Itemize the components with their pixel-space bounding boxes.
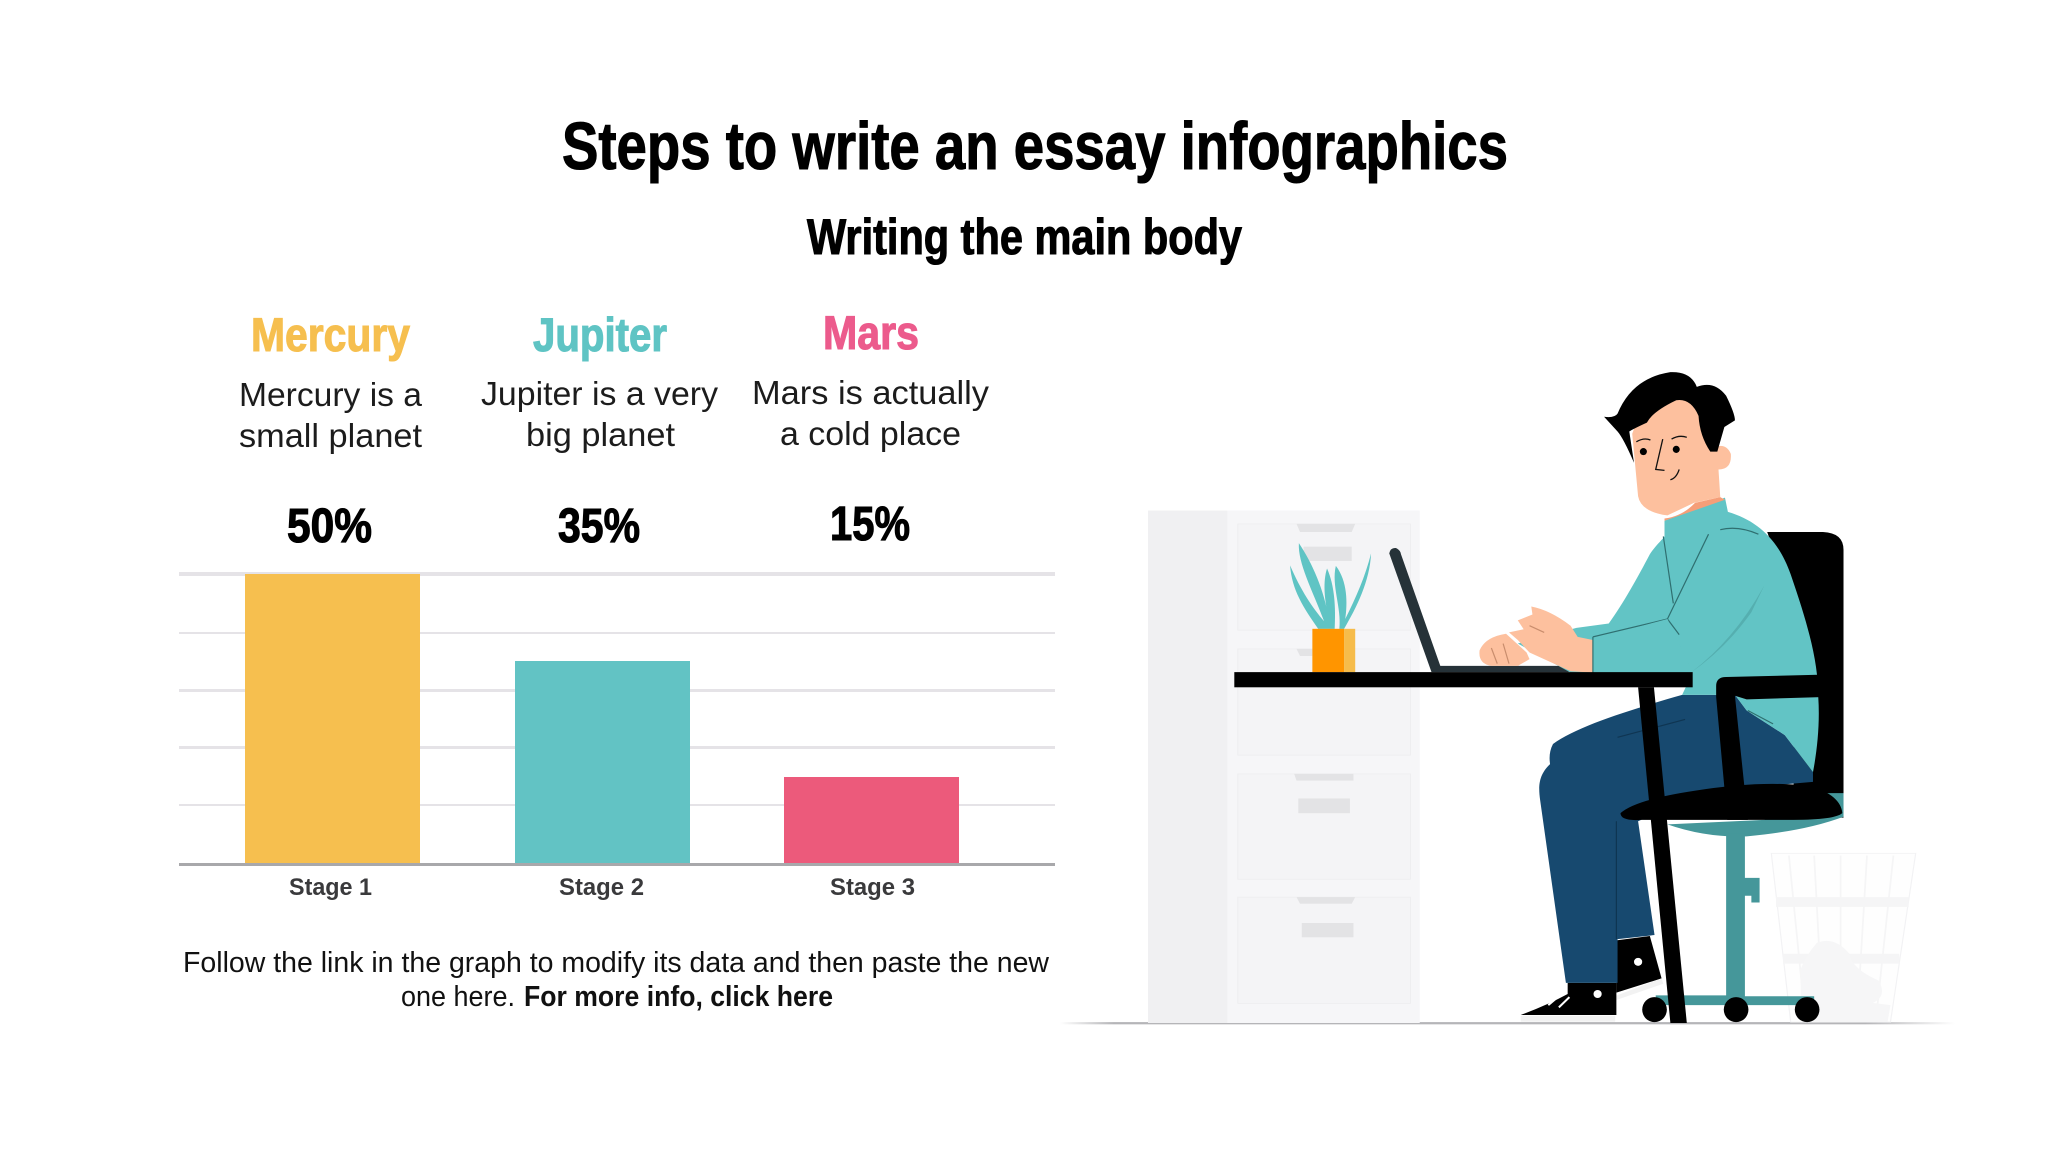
leaves: [1290, 543, 1371, 629]
chair arm: [1716, 675, 1821, 820]
desk leg: [1638, 687, 1687, 1023]
head: [1632, 389, 1731, 515]
chair seat base: [1642, 793, 1844, 1022]
title: Steps to write an essay infographics: [562, 109, 1508, 184]
description: Jupiter: Jupiter is a very: [481, 375, 718, 412]
heading: Jupiter: Jupiter: [533, 308, 667, 361]
filing cabinet: [1148, 511, 1420, 1023]
bar: Stage 3: [784, 777, 959, 864]
plant: [1290, 543, 1371, 672]
desk top: [1234, 672, 1693, 687]
label: Stage 2: Stage 2: [559, 874, 644, 901]
value: 15%: 15%: [830, 498, 910, 551]
pot: [1312, 629, 1344, 672]
description: Jupiter: big planet: [526, 416, 675, 453]
heading: Mercury: Mercury: [251, 308, 410, 361]
footer note: For more info, click here: [524, 981, 833, 1013]
label: Stage 1: Stage 1: [289, 874, 372, 901]
laptop: [1389, 548, 1569, 672]
column: Jupiter: [481, 308, 718, 553]
footer note: Follow the link in the graph to modify its data and then paste the new: [183, 947, 1050, 979]
bar: Stage 1: [245, 574, 420, 864]
trousers: [1539, 695, 1813, 983]
column: Mercury: [239, 308, 423, 553]
chair back: [1767, 532, 1844, 818]
illustration: man working at desk: [1060, 372, 1955, 1024]
description: Mercury: Mercury is a: [239, 376, 423, 413]
chair seat: [1620, 784, 1842, 820]
value: 50%: 50%: [287, 500, 372, 553]
column: Mars: [752, 306, 990, 551]
hair: [1604, 372, 1735, 463]
shirt: [1518, 498, 1819, 772]
face details: [1636, 436, 1687, 480]
label: Stage 3: Stage 3: [830, 874, 915, 901]
hands: [1479, 607, 1593, 673]
far shoe: [1615, 936, 1663, 1001]
description: Mars: a cold place: [780, 415, 961, 452]
subtitle: Writing the main body: [807, 209, 1242, 265]
description: Mercury: small planet: [239, 417, 422, 454]
description: Jupiter: [481, 375, 718, 453]
shirt shading: [1691, 586, 1764, 673]
bar chart: [179, 572, 1055, 901]
man: [1479, 372, 1819, 1022]
heading: Mars: Mars: [823, 306, 919, 359]
bar: Stage 2: [515, 661, 690, 864]
value: 35%: 35%: [558, 500, 640, 553]
trash bin: [1771, 853, 1916, 1022]
near shoe: [1521, 983, 1616, 1022]
cuff: [1593, 619, 1693, 673]
description: Mercury: [239, 376, 423, 454]
description: Mars: [752, 374, 990, 452]
ground line: [1060, 1022, 1955, 1024]
description: Mars: Mars is actually: [752, 374, 990, 411]
footer note: [183, 947, 1050, 1013]
footer note: one here.: [401, 981, 515, 1013]
crumpled paper: [1801, 941, 1890, 1022]
